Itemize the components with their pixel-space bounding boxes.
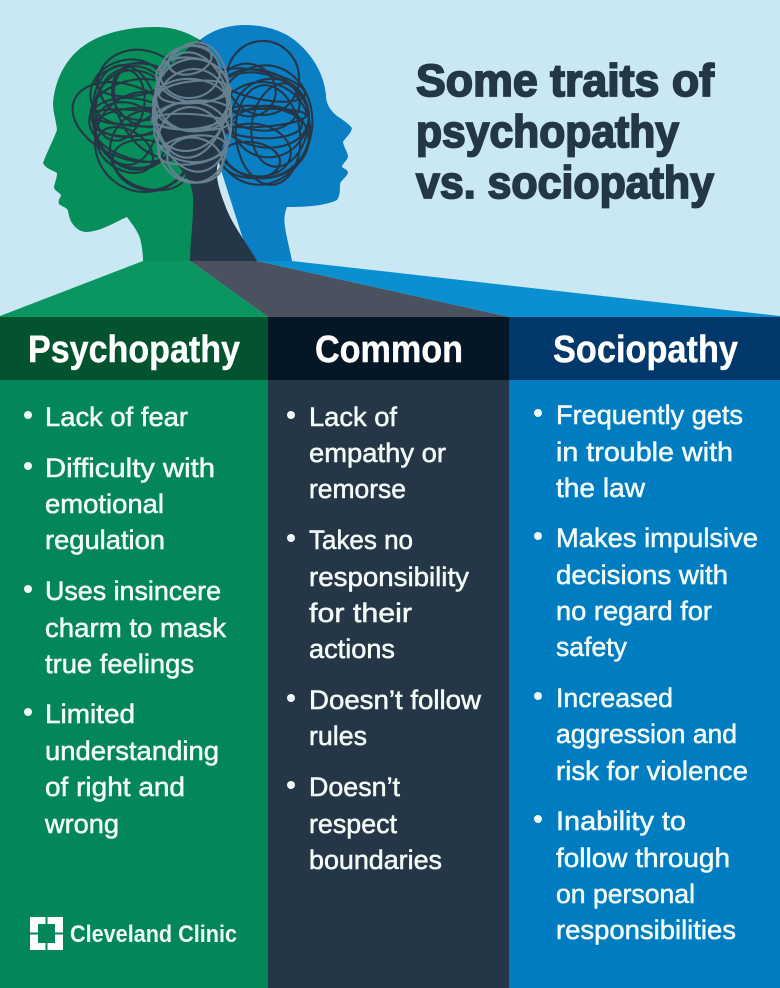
bullet list: common traits: Takes no	[309, 525, 413, 555]
bullet list: common traits: Lack of	[309, 402, 397, 432]
connector: grey wedge	[190, 261, 509, 317]
header: common	[268, 317, 509, 380]
bullet list: common traits: for their	[309, 598, 412, 628]
bullet list: psychopathy traits: understanding	[45, 736, 219, 766]
title: psychopathy	[416, 106, 679, 157]
scribble: dark lines on blue side	[201, 36, 324, 193]
bullet list: common traits: respect	[309, 809, 397, 839]
logo: Cleveland Clinic	[30, 917, 237, 950]
header: sociopathy	[509, 317, 780, 380]
bullet list: sociopathy traits: follow through	[556, 843, 730, 873]
title	[416, 55, 715, 208]
bullet list: psychopathy traits: of right and	[45, 772, 185, 802]
header: common: Common	[315, 329, 463, 371]
header: sociopathy: Sociopathy	[553, 329, 738, 371]
bullet list: psychopathy traits: Difficulty with	[45, 453, 215, 483]
bullet list: psychopathy traits: true feelings	[45, 649, 194, 679]
bullet list: sociopathy traits: decisions with	[556, 560, 728, 590]
bullet list: psychopathy traits: Uses insincere	[45, 576, 221, 606]
bullet list: psychopathy traits	[24, 402, 227, 839]
bullet list: psychopathy traits: emotional	[45, 489, 164, 519]
title: vs. sociopathy	[416, 157, 714, 208]
bullet list: sociopathy traits: on personal	[556, 879, 695, 909]
head overlap: dark shared region	[154, 40, 257, 261]
bullet list: sociopathy traits: the law	[556, 473, 646, 503]
head: green silhouette facing left	[43, 27, 200, 261]
bullet list: sociopathy traits: Inability to	[556, 806, 686, 836]
bullet list: common traits: responsibility	[309, 562, 470, 592]
illustration: two overlapping head silhouettes	[43, 25, 352, 261]
bullet list: sociopathy traits: responsibilities	[556, 915, 736, 945]
bullet list: common traits: boundaries	[309, 845, 442, 875]
bullet list: sociopathy traits: Makes impulsive	[556, 523, 758, 553]
connector: green wedge	[0, 261, 268, 317]
bullet list: common traits: remorse	[309, 474, 406, 504]
bullet list: sociopathy traits: no regard for	[556, 596, 712, 626]
connector: blue wedge	[257, 261, 780, 317]
bullet list: common traits: Doesn’t follow	[309, 685, 482, 715]
bullet list: psychopathy traits: Limited	[45, 699, 135, 729]
bullet list: common traits	[287, 402, 482, 875]
bullet list: psychopathy traits: regulation	[45, 525, 165, 555]
bullet list: sociopathy traits: risk for violence	[556, 756, 748, 786]
title: Some traits of	[416, 55, 715, 106]
header: psychopathy: Psychopathy	[28, 329, 240, 371]
bullet list: common traits: empathy or	[309, 438, 446, 468]
bullet list: sociopathy traits: safety	[556, 632, 627, 662]
bullet list: sociopathy traits: in trouble with	[556, 437, 733, 467]
scribble: dark lines on green side	[61, 43, 209, 206]
bullet list: psychopathy traits: Lack of fear	[45, 402, 188, 432]
bullet list: common traits: Doesn’t	[309, 772, 400, 802]
scribble: grey lines in overlap	[140, 38, 240, 189]
bullet list: psychopathy traits: charm to mask	[45, 613, 227, 643]
panel: sociopathy	[509, 317, 780, 988]
bullet list: sociopathy traits	[534, 400, 758, 945]
bullet list: sociopathy traits: Increased	[556, 683, 673, 713]
bullet list: common traits: rules	[309, 721, 367, 751]
bullet list: common traits: actions	[309, 634, 395, 664]
logo: Cleveland Clinic: Cleveland Clinic	[70, 921, 237, 948]
panel: psychopathy	[0, 317, 268, 988]
bullet list: psychopathy traits: wrong	[44, 809, 119, 839]
header: psychopathy	[0, 317, 268, 380]
bullet list: sociopathy traits: aggression and	[556, 719, 737, 749]
icon: Cleveland Clinic cross	[30, 917, 63, 950]
bullet list: sociopathy traits: Frequently gets	[556, 400, 743, 430]
panel: common	[268, 317, 509, 988]
head: blue silhouette facing right	[200, 25, 352, 261]
